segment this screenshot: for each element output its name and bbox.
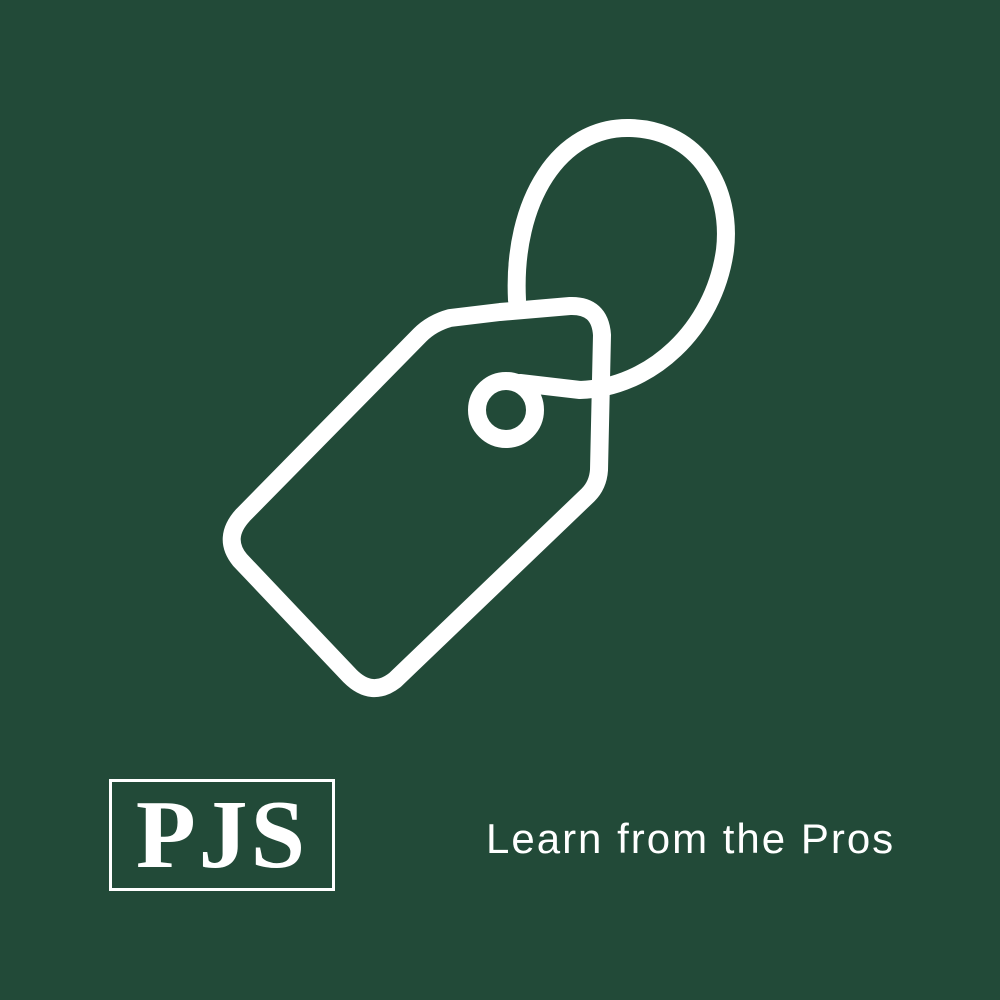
logo: PJS: PJS xyxy=(136,781,308,889)
tagline: Learn from the Pros xyxy=(486,815,895,862)
